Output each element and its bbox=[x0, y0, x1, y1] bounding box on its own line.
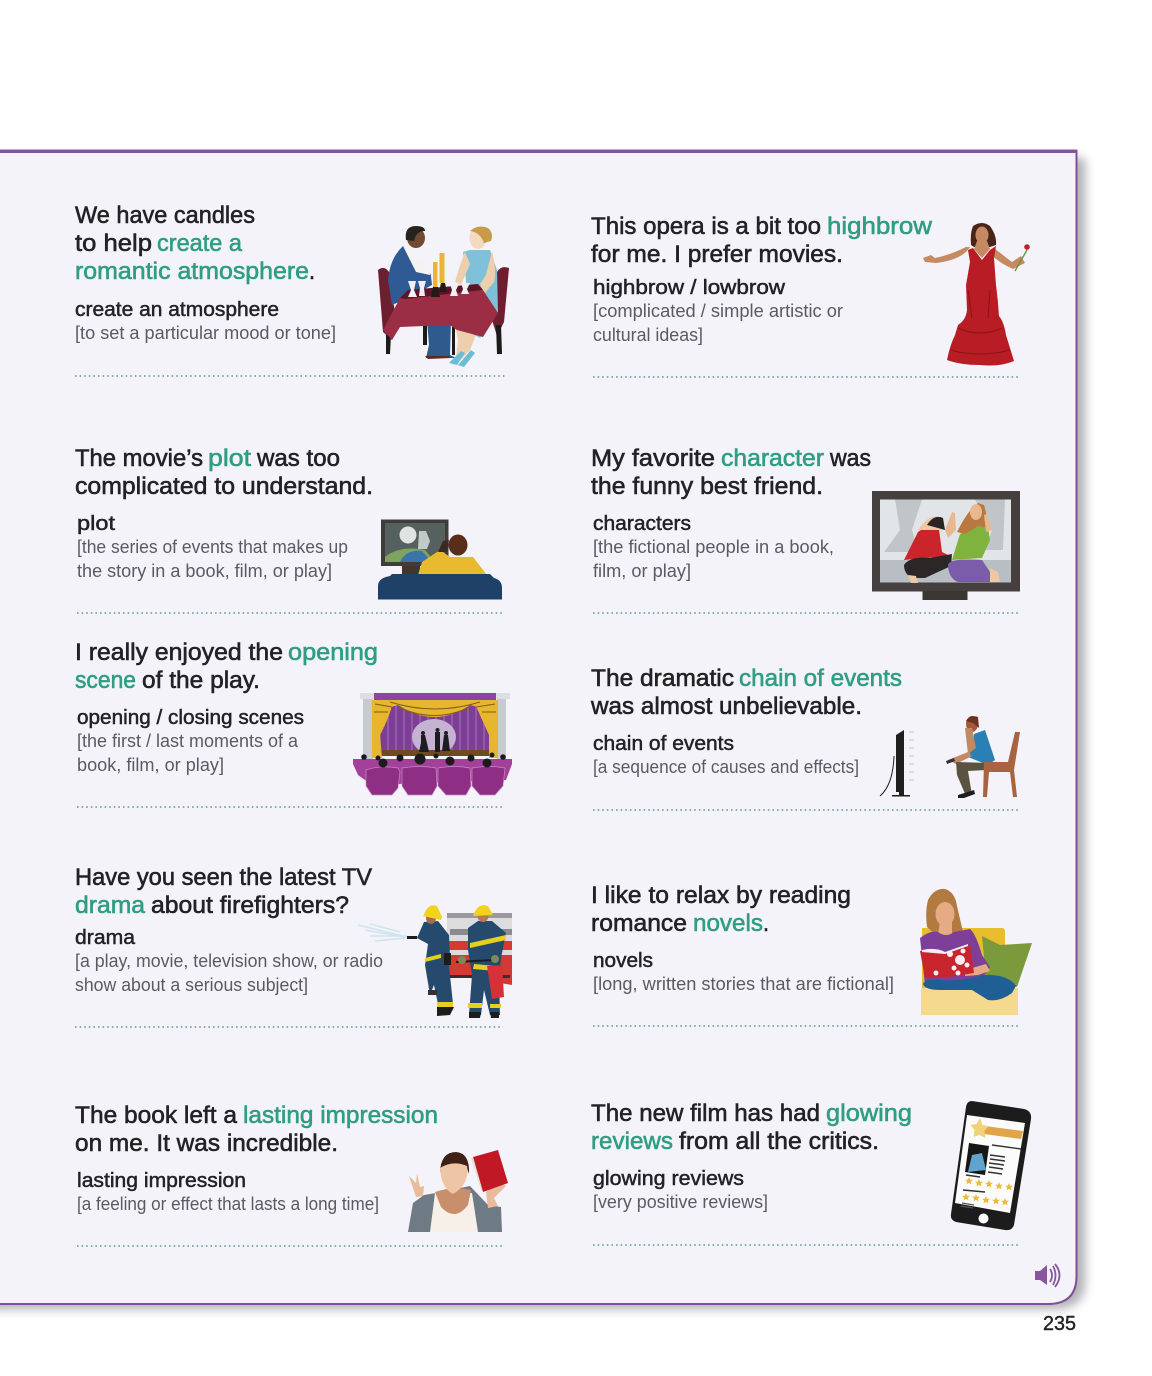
definition: film, or play] bbox=[593, 560, 691, 581]
example sentence: to help bbox=[75, 230, 152, 257]
example sentence: chain of events bbox=[739, 665, 902, 692]
icon: smartphone showing star reviews bbox=[951, 1101, 1031, 1230]
example sentence: scene bbox=[75, 667, 136, 694]
page number: 235 bbox=[1043, 1312, 1076, 1335]
example sentence bbox=[591, 1100, 912, 1155]
vocabulary entry: drama bbox=[75, 864, 503, 1027]
example sentence: glowing bbox=[826, 1100, 912, 1127]
example sentence: complicated to understand. bbox=[75, 473, 373, 500]
icon: woman holding up a red book bbox=[408, 1150, 508, 1232]
definition: [to set a particular mood or tone] bbox=[75, 322, 336, 343]
vocabulary entry: chain of events bbox=[590, 665, 1020, 810]
vocabulary entry: characters bbox=[591, 445, 1020, 613]
example sentence: romantic atmosphere bbox=[75, 258, 309, 285]
icon: opera singer in red gown bbox=[923, 223, 1030, 366]
definition: [very positive reviews] bbox=[593, 1191, 768, 1212]
definition: [the fictional people in a book, bbox=[593, 536, 834, 557]
example sentence: of the play. bbox=[142, 667, 260, 694]
example sentence bbox=[75, 1102, 438, 1157]
example sentence: character bbox=[721, 445, 824, 472]
example sentence: highbrow bbox=[827, 213, 932, 240]
example sentence: the funny best friend. bbox=[591, 473, 823, 500]
definition: [the series of events that makes up bbox=[77, 536, 348, 557]
definition: cultural ideas] bbox=[593, 324, 703, 345]
icon: couple dining by candlelight bbox=[378, 226, 509, 367]
example sentence: novels bbox=[693, 910, 763, 937]
term: plot bbox=[77, 512, 115, 535]
definition bbox=[77, 730, 299, 775]
example sentence: I really enjoyed the bbox=[75, 639, 283, 666]
definition: [long, written stories that are fictional] bbox=[593, 973, 894, 994]
example sentence: . bbox=[309, 258, 315, 285]
example sentence: opening bbox=[288, 639, 378, 666]
example sentence: plot bbox=[208, 445, 251, 472]
definition: [complicated / simple artistic or bbox=[593, 300, 843, 321]
vocabulary entry: opening / closing scenes bbox=[75, 639, 503, 807]
example sentence bbox=[591, 882, 851, 937]
example sentence: from all the critics. bbox=[679, 1128, 879, 1155]
term: characters bbox=[593, 512, 691, 535]
example sentence: lasting impression bbox=[243, 1102, 438, 1129]
definition: [a play, movie, television show, or radio bbox=[75, 950, 383, 971]
example sentence: We have candles bbox=[75, 202, 255, 229]
example sentence: The dramatic bbox=[591, 665, 734, 692]
example sentence: I like to relax by reading bbox=[591, 882, 851, 909]
icon: man watching television from sofa bbox=[378, 520, 502, 600]
definition bbox=[593, 536, 834, 581]
example sentence: romance bbox=[591, 910, 687, 937]
example sentence: reviews bbox=[591, 1128, 673, 1155]
example sentence: Have you seen the latest TV bbox=[75, 864, 373, 891]
example sentence bbox=[591, 213, 932, 268]
example sentence: The movie’s bbox=[75, 445, 203, 472]
icon: audio speaker bbox=[1035, 1264, 1060, 1287]
example sentence bbox=[75, 202, 315, 285]
icon: man in chair watching television bbox=[880, 716, 1020, 798]
example sentence: The new film has had bbox=[591, 1100, 820, 1127]
icon: two firefighters with hose bbox=[358, 905, 512, 1018]
definition: show about a serious subject] bbox=[75, 974, 308, 995]
vocabulary entry: plot bbox=[75, 445, 503, 613]
definition: [the first / last moments of a bbox=[77, 730, 299, 751]
vocabulary entry: create an atmosphere bbox=[75, 202, 505, 376]
example sentence: on me. It was incredible. bbox=[75, 1130, 338, 1157]
definition bbox=[77, 536, 348, 581]
example sentence: was bbox=[829, 445, 871, 472]
example sentence: about firefighters? bbox=[151, 892, 349, 919]
definition: the story in a book, film, or play] bbox=[77, 560, 332, 581]
panel: page card bbox=[0, 150, 1085, 1309]
example sentence bbox=[75, 864, 373, 919]
vocabulary entry: glowing reviews bbox=[591, 1100, 1020, 1245]
term: chain of events bbox=[593, 732, 734, 755]
example sentence bbox=[75, 639, 378, 694]
term: novels bbox=[593, 949, 653, 972]
example sentence: My favorite bbox=[591, 445, 715, 472]
definition bbox=[593, 300, 843, 345]
term: lasting impression bbox=[77, 1169, 246, 1192]
example sentence: This opera is a bit too bbox=[591, 213, 821, 240]
term: highbrow / lowbrow bbox=[593, 276, 785, 299]
definition: book, film, or play] bbox=[77, 754, 224, 775]
vocabulary entry: highbrow / lowbrow bbox=[591, 213, 1020, 377]
icon: woman reading a romance novel bbox=[920, 889, 1032, 1015]
icon: television showing two characters bbox=[872, 491, 1020, 600]
definition: [a feeling or effect that lasts a long time] bbox=[77, 1193, 379, 1214]
term: glowing reviews bbox=[593, 1167, 744, 1190]
vocabulary entry: lasting impression bbox=[75, 1102, 503, 1246]
example sentence: for me. I prefer movies. bbox=[591, 241, 843, 268]
example sentence: drama bbox=[75, 892, 145, 919]
example sentence: . bbox=[763, 910, 769, 937]
term: drama bbox=[75, 926, 136, 949]
example sentence: was too bbox=[256, 445, 340, 472]
definition: [a sequence of causes and effects] bbox=[593, 756, 859, 777]
vocabulary entry: novels bbox=[591, 882, 1020, 1026]
definition bbox=[75, 950, 383, 995]
example sentence bbox=[591, 445, 871, 500]
example sentence: create a bbox=[157, 230, 242, 257]
example sentence bbox=[590, 665, 902, 720]
icon: theatre stage with audience bbox=[353, 693, 512, 795]
term: opening / closing scenes bbox=[77, 706, 304, 729]
example sentence bbox=[75, 445, 373, 500]
term: create an atmosphere bbox=[75, 298, 279, 321]
example sentence: The book left a bbox=[75, 1102, 237, 1129]
example sentence: was almost unbelievable. bbox=[590, 693, 862, 720]
